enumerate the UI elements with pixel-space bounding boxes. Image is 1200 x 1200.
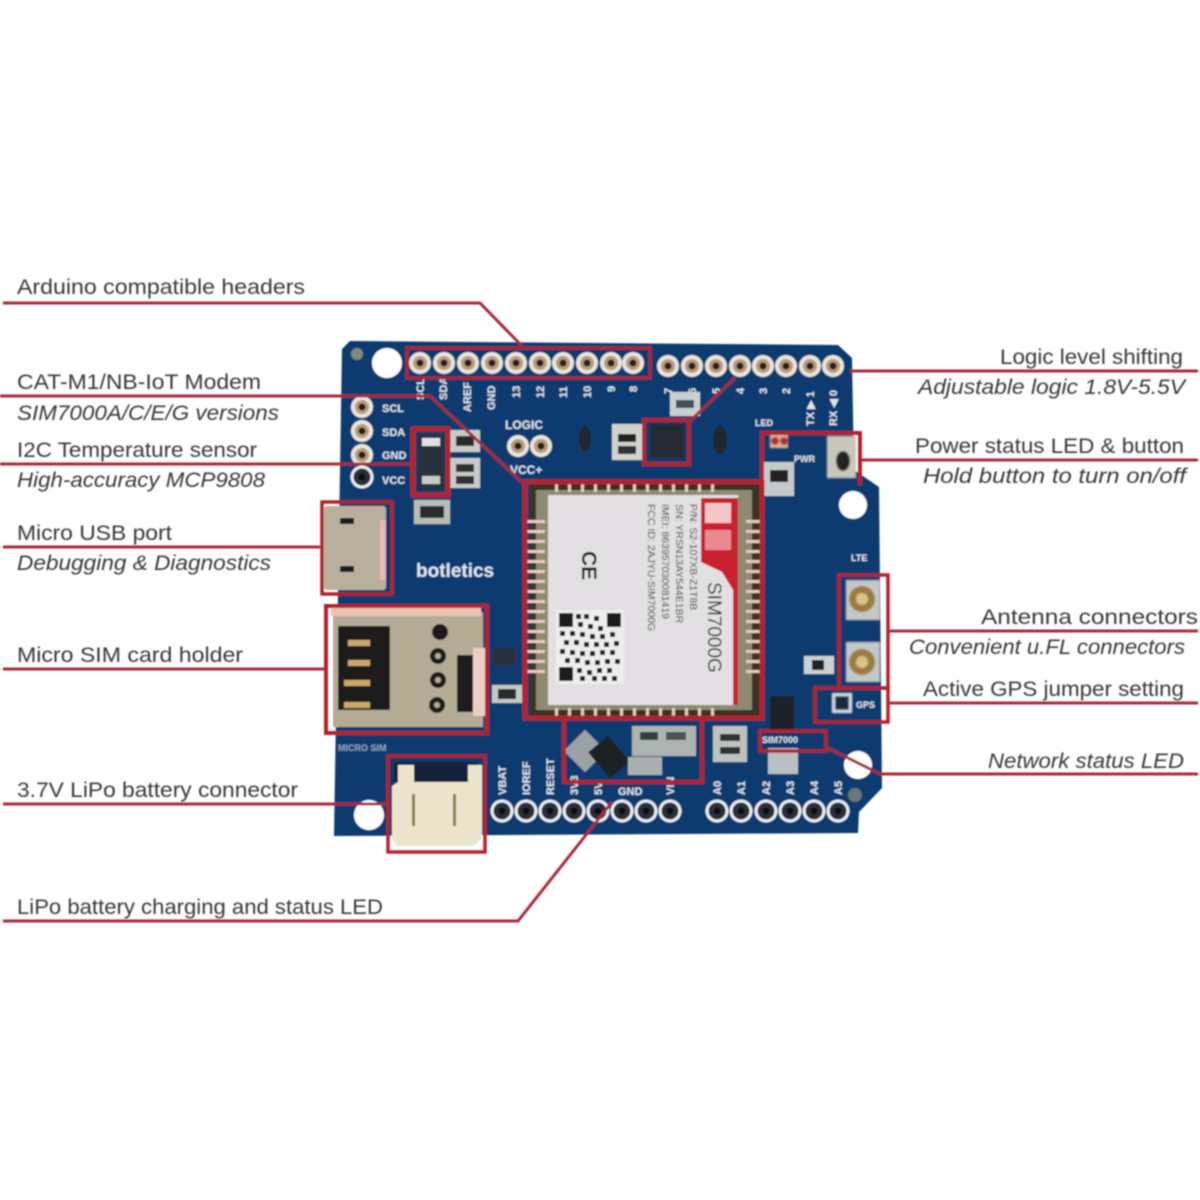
silkscreen labels: 4 [735,387,747,394]
callout: antenna connectors: Antenna connectors [981,606,1198,629]
charging circuit parts [564,726,696,778]
bottom header pads right [706,800,850,822]
silkscreen labels: VIN [665,777,677,795]
callout: logic level shifting [689,346,1198,422]
silkscreen labels: 6 [687,388,699,394]
I2C header pads [350,396,374,488]
module model name: SIM7000G [703,582,724,673]
silkscreen labels: SDA [438,377,450,400]
QR code [556,610,624,684]
silkscreen labels: 3 [758,388,770,394]
module spec text: FCC ID: 2AJYU-SIM7000G [645,504,657,631]
callout: micro SIM card holder: Micro SIM card holder [17,644,243,667]
silkscreen labels: 9 [606,386,618,392]
CE mark: CE [577,551,600,580]
silkscreen labels: AREF [462,382,474,412]
callout: Arduino compatible headers: Arduino compatible headers [17,276,305,299]
bottom header pads left [490,800,682,822]
silkscreen labels: 7 [663,388,675,394]
silkscreen labels: 13 [511,386,523,398]
callout: network status LED: Network status LED [988,750,1184,773]
silkscreen labels: A5 [833,781,845,795]
GPS jumper [832,693,852,713]
callout: active GPS jumper: Active GPS jumper setting [923,678,1184,701]
silkscreen labels: GND [486,386,498,410]
silkscreen labels: 10 [582,386,594,398]
highlight boxes on components [322,348,888,852]
callout: power status LED and button: Power status LED & button [915,435,1184,458]
temperature sensor chip [418,434,444,490]
callout: logic level shifting: Adjustable logic 1.8V-5.5V [916,376,1187,399]
silkscreen labels: A4 [809,780,821,795]
callout: Arduino compatible headers [3,276,522,346]
callout: micro USB port: Debugging & Diagnostics [17,552,272,575]
callout: LiPo charging and status LED: LiPo battery charging and status LED [17,896,383,919]
SIMCom logo sticker [701,498,738,705]
logic level shifter chip [650,424,684,458]
silkscreen labels: SCL [415,378,427,400]
micro USB port [324,506,386,590]
callout: LiPo charging and status LED [3,802,612,921]
callout: CAT-M1/NB-IoT modem: SIM7000A/C/E/G versions [17,402,280,425]
logic jumper pads [507,435,552,457]
module spec text: IMEI: 863957030081419 [659,504,671,619]
silkscreen labels: 5V [593,781,605,795]
callout: CAT-M1/NB-IoT modem [0,371,526,486]
callout: I2C temperature sensor: I2C Temperature sensor [17,439,257,462]
silkscreen labels [338,377,875,798]
callout: logic level shifting: Logic level shifting [1000,346,1183,369]
circuit board [0,276,1198,921]
board outline [334,341,882,836]
callout: power status LED and button [860,435,1198,488]
silkscreen labels: MICRO SIM [338,743,386,753]
silkscreen labels: A2 [761,781,773,795]
callout: CAT-M1/NB-IoT modem: CAT-M1/NB-IoT Modem [17,371,261,394]
silkscreen labels: RESET [545,758,557,795]
callout: micro USB port [3,522,320,575]
silkscreen labels: VCC [382,475,405,487]
callout: power status LED and button: Hold button to turn on/off [923,465,1188,488]
silkscreen labels: botletics [416,561,494,582]
silkscreen labels: VCC+ [510,463,542,477]
top header pads left [409,352,644,374]
top header pads right [657,355,844,377]
silkscreen labels: 8 [628,386,640,392]
small SMD parts [414,392,834,774]
silkscreen labels: RX ◀ 0 [828,390,840,426]
silkscreen labels: 11 [558,386,570,398]
callout: micro USB port: Micro USB port [17,522,172,545]
callout: I2C temperature sensor: High-accuracy MCP9808 [17,469,265,492]
callout: network status LED [826,747,1198,774]
silkscreen labels: PWR [794,454,815,464]
silkscreen labels: SDA [382,427,405,439]
silkscreen labels: IOREF [521,761,533,795]
mounting holes [354,348,872,830]
LED pads [770,434,788,448]
silkscreen labels: LTE [851,553,867,563]
silkscreen labels: SCL [382,403,404,415]
callout: I2C temperature sensor [0,439,412,492]
silkscreen labels: A0 [712,781,724,795]
callout: antenna connectors: Convenient u.FL connectors [909,636,1186,659]
silkscreen labels: GND [382,450,406,462]
silkscreen labels: A3 [785,781,797,795]
silkscreen labels: SIM7000 [762,735,798,745]
module spec text: P/N: S2-107XB-Z1T8B [687,504,699,610]
module spec text [645,504,699,631]
silkscreen labels: 2 [781,388,793,394]
micro SIM card holder [331,608,485,727]
silkscreen labels: 3V3 [569,775,581,795]
callout: LiPo battery connector: 3.7V LiPo battery connector [17,779,298,802]
silkscreen labels: GND [618,786,642,798]
silkscreen labels: A1 [736,781,748,795]
silkscreen labels: TX ▶ 1 [805,391,817,426]
silkscreen labels: LED [755,418,774,428]
silkscreen labels: LOGIC [505,418,543,432]
silkscreen labels: VBAT [497,766,509,795]
silkscreen labels: 5 [711,388,723,394]
callout: antenna connectors [888,606,1198,659]
SIM7000 modem module [527,482,762,718]
antenna connectors [846,580,880,682]
battery connector [392,762,482,846]
power button [827,436,856,478]
silkscreen labels: GPS [856,700,875,710]
silkscreen labels: 12 [535,386,547,398]
module spec text: SN: YRSN13AY544E1BR [673,504,685,624]
